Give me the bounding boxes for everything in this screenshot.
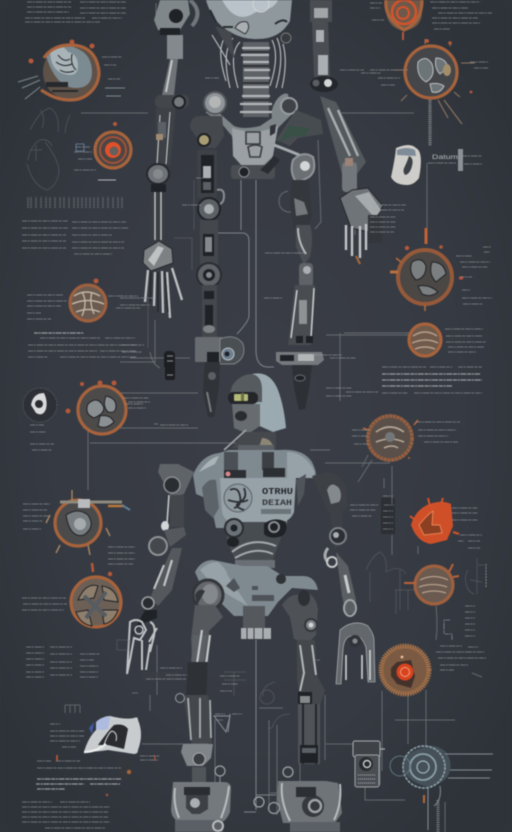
gear: large right (390, 228, 492, 311)
lower robot (117, 373, 375, 832)
lower robot: torso (193, 450, 316, 528)
right side components (350, 0, 493, 832)
text block: under left gear (30, 425, 54, 450)
lower robot: left leg (171, 605, 231, 832)
callout: datum label: Datum (432, 154, 458, 161)
lower robot: head (228, 373, 286, 434)
upper robot: left arm (143, 0, 198, 318)
gear: brown mid (352, 414, 460, 482)
upper robot: head and collar (206, 0, 292, 43)
gear: orange mech (410, 498, 482, 554)
lower robot: right leg (254, 590, 342, 832)
text block: small table left (108, 547, 135, 564)
gear: small right (408, 323, 486, 357)
gear: teal outline (390, 746, 493, 832)
sketches: blueprint details around lower legs (140, 424, 290, 761)
dashed column (428, 100, 432, 146)
text band: column bars (28, 197, 122, 208)
lower robot: left arm (117, 464, 194, 681)
gear: red ring (74, 122, 132, 180)
gear: small brown left (27, 278, 140, 322)
lower robot: abdomen (225, 519, 286, 568)
gear: brown right (366, 552, 486, 640)
text block: right vertical table (444, 606, 475, 640)
icon: camera device (353, 741, 385, 787)
gear: top right (370, 39, 488, 124)
callout: datum label (427, 149, 482, 231)
gear: top orange swirl (370, 0, 422, 40)
icon: white kidney component (391, 145, 421, 185)
gear: brown left 2 (66, 380, 150, 435)
text block: lower left notes (28, 333, 136, 357)
lower robot: pelvis (193, 560, 318, 639)
text block: side vertical (350, 466, 395, 555)
gear: top left brain (18, 40, 125, 100)
upper robot: left leg (190, 116, 244, 417)
icon: white mech fragment (84, 716, 141, 780)
sketch: faint anatomy outline (27, 108, 70, 190)
text block: three-column left (26, 647, 100, 677)
lower robot: neck (224, 430, 276, 453)
lower robot: right arm (312, 472, 375, 684)
gear: brown left 3 (22, 563, 122, 628)
icon: eye in ring (23, 388, 57, 422)
upper robot: right arm (310, 0, 383, 264)
upper robot (143, 0, 383, 417)
text block: right wide notes (382, 367, 482, 393)
connector lines (81, 3, 455, 832)
lower robot: torso: OTRHU (262, 487, 293, 497)
text block: dark notes under kidney (370, 205, 406, 232)
text block: top right (430, 2, 492, 29)
icon: small black capsule (164, 351, 175, 380)
text block: bottom left notes (22, 705, 121, 828)
text block: mid left notes (22, 221, 128, 254)
text block: top left notes (25, 2, 126, 22)
text block: upper-robot side labels (120, 70, 381, 404)
upper robot: pelvis shield (204, 92, 323, 179)
upper robot: right leg (276, 154, 324, 410)
gear: left mech with bar (23, 490, 130, 555)
upper robot: ribs and spine (212, 26, 285, 117)
lower robot: torso: DEIAH (262, 499, 292, 508)
gear: red sunburst (380, 645, 486, 695)
